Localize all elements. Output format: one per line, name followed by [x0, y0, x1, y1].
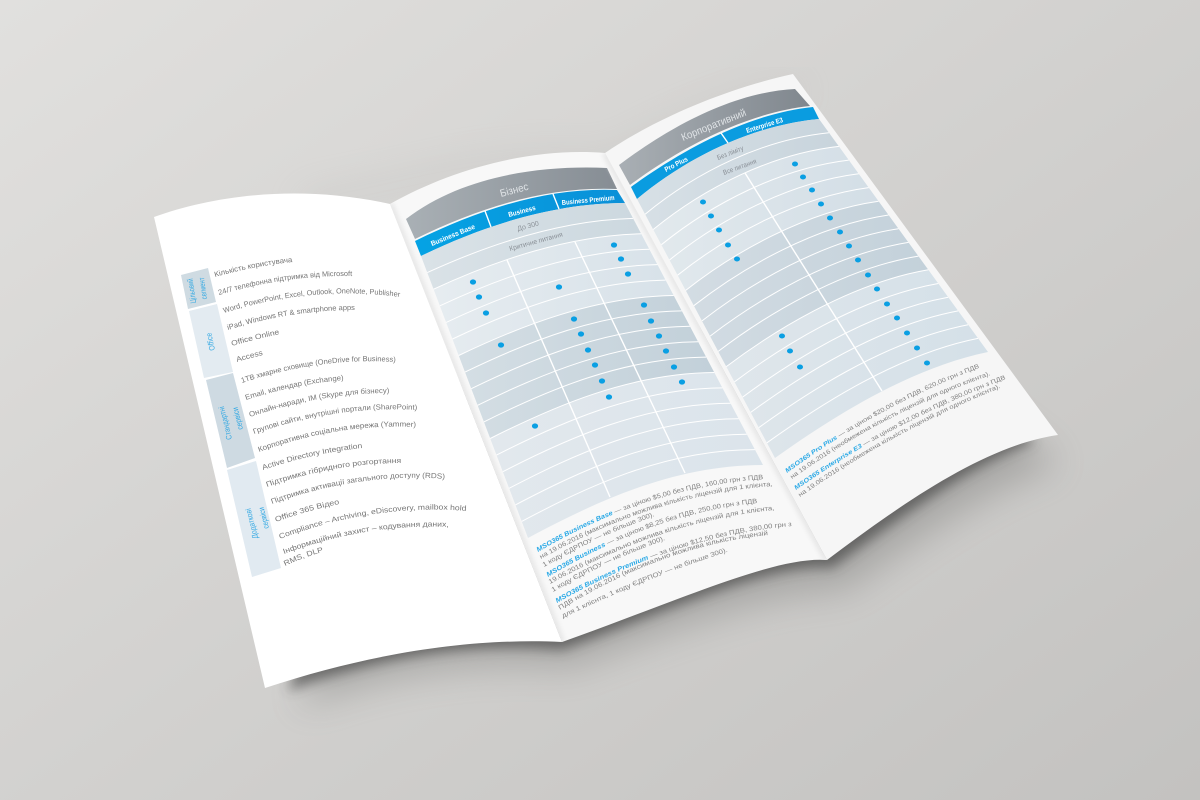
plan tabs: Pro Plus: [664, 156, 689, 174]
feature list: Підтримка гібридного розгортання: [266, 459, 401, 487]
paper shadow: [288, 300, 1060, 708]
right page sheet: [605, 74, 1058, 560]
dots: corporate plan features: [700, 162, 930, 370]
pricing notes: business: MSO365 Business Premium — за ціною $12,50 без ПДВ, 380,00 грн з: [556, 522, 792, 603]
feature list: RMS, DLP: [284, 548, 322, 566]
plan tabs: Enterprise E3: [746, 117, 784, 135]
category block: target segment: сегмент: [197, 277, 209, 300]
category block: standard services: [206, 373, 255, 468]
header band: business: [406, 168, 617, 239]
comparison table: corporate: Все питання: [722, 158, 758, 177]
category block: target segment: [181, 268, 216, 309]
comparison table: corporate: Без ліміту: [716, 144, 745, 162]
plan tabs: Business Base: [430, 224, 476, 248]
feature list: Access: [237, 351, 262, 362]
dots: business plan features: [470, 242, 685, 429]
category block: standard services: сервіси: [231, 406, 245, 431]
pricing notes: business: 1 коду ЄДРПОУ — не більше 300).: [542, 512, 654, 567]
pricing notes: business: [536, 474, 792, 620]
soft shadow behind top edge: [300, 90, 800, 204]
header band: corporate: Корпоративний: [680, 107, 748, 144]
category block: office: Office: [204, 332, 217, 351]
plan tabs: [415, 190, 625, 256]
header band: business: Бізнес: [499, 181, 530, 200]
panel: left features column: [154, 194, 562, 688]
feature list: Підтримка активації загального доступу (RDS): [271, 472, 444, 504]
left page sheet: [154, 194, 562, 688]
pricing notes: corporate: на 19.06.2016 (необмежена кількість ліцензій для одного клієнта).: [790, 372, 990, 479]
feature list: Інформаційний захист – кодування даних,: [283, 522, 448, 554]
pricing notes: corporate: MSO365 Enterprise E3 — за ціною $12,00 без ПДВ, 380,00 грн з ПДВ: [794, 376, 1006, 490]
pricing notes: business: MSO365 Business — за ціною $8,25 без ПДВ, 250,00 грн з ПДВ: [546, 498, 757, 577]
feature list: [214, 258, 466, 566]
category block: office: [189, 304, 233, 378]
pricing notes: business: для 1 клієнта, 1 коду ЄДРПОУ — не більше 300).: [562, 548, 728, 620]
feature list: iPad, Windows RT & smartphone apps: [226, 306, 355, 330]
header band: corporate: [619, 89, 810, 185]
comparison table: business: Критичне питання: [509, 231, 564, 253]
category block: additional services: [227, 461, 281, 577]
comparison table: business: До 300: [517, 220, 540, 233]
category block: standard services: Стандартні: [217, 405, 234, 441]
feature list: Active Directory Integration: [263, 444, 362, 470]
category block: additional services: Додаткові: [244, 507, 260, 540]
feature list: Групові сайти, внутрішні портали (SharePoint): [253, 404, 417, 434]
pricing notes: business: 19.06.2016 (максимально можлива кількість ліцензій для 1 клієнта,: [548, 506, 774, 584]
pricing notes: business: ПДВ на 19.06.2016 (максимально можлива кількість ліцензій: [558, 530, 768, 610]
pricing notes: corporate: MSO365 Pro Plus — за ціною $20,00 без ПДВ, 620,00 грн з ПДВ: [785, 364, 979, 473]
comparison table: corporate: [637, 119, 988, 458]
feature list: 1TB хмарне сховище (OneDrive for Business): [241, 356, 396, 383]
plan tabs: [631, 107, 819, 199]
feature list: Кількість користувача: [214, 258, 292, 277]
category block: target segment: Цільовий: [186, 278, 198, 304]
pricing notes: business: MSO365 Business Base — за ціною $5,00 без ПДВ, 160,00 грн з ПДВ: [536, 474, 763, 552]
feature list: Email, календар (Exchange): [245, 374, 344, 400]
plan tabs: Business Premium: [562, 195, 615, 207]
pricing notes: corporate: на 19.06.2016 (необмежена кількість ліцензій для одного клієнта).: [798, 385, 1000, 497]
feature list: Word, PowerPoint, Excel, Outlook, OneNote, Publisher: [222, 288, 400, 312]
feature list: Office 365 Відео: [275, 500, 339, 522]
plan tabs: Business: [508, 205, 537, 219]
panel: corporate plans: [605, 74, 1058, 560]
feature list: Корпоративна соціальна мережа (Yammer): [258, 421, 416, 452]
pricing notes: business: 1 коду ЄДРПОУ — не більше 300).: [552, 536, 664, 592]
pricing notes: business: на 19.06.2016 (максимально можлива кількість ліцензій для 1 клієнта,: [540, 482, 772, 559]
feature list: 24/7 телефонна підтримка від Microsoft: [218, 270, 352, 295]
feature list: Compliance – Archiving, eDiscovery, mailbox hold: [279, 504, 466, 538]
panel: business plans: [390, 152, 827, 642]
middle page sheet: [390, 152, 827, 642]
comparison table: business: [421, 203, 763, 538]
feature list: Office Online: [232, 330, 279, 346]
feature list: Онлайн-наради, IM (Skype для бізнесу): [249, 388, 389, 416]
category block: additional services: сервіси: [257, 506, 271, 530]
